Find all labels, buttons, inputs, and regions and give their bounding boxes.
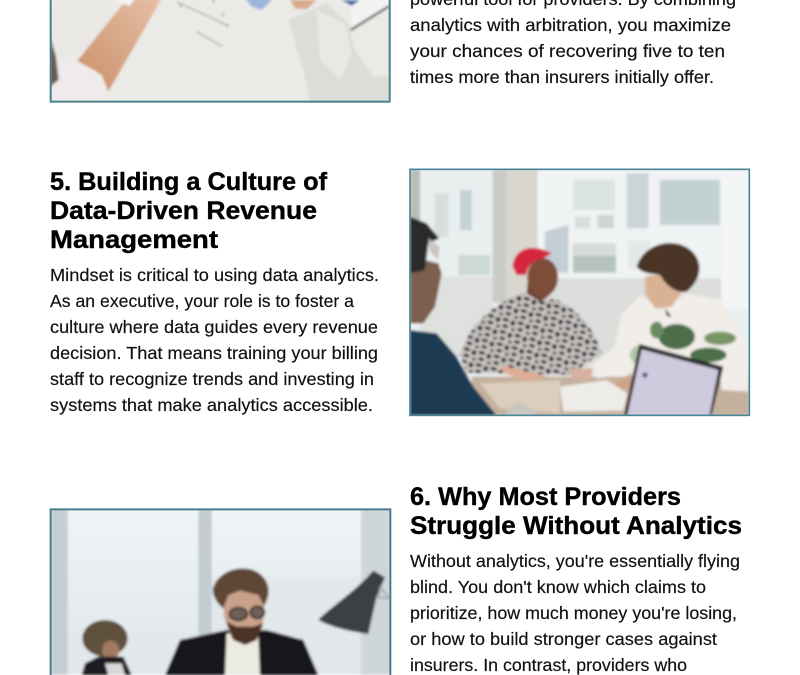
laptop — [624, 344, 723, 415]
heading: section 6: 6. Why Most Providers — [410, 483, 681, 511]
body text: section 5: Mindset is critical to using data analytics. — [50, 265, 379, 285]
photo: man with glasses at office desk — [51, 509, 390, 675]
body text: section 6: insurers. In contrast, providers who — [410, 655, 687, 675]
body text: section 4 ending: times more than insurers initially offer. — [410, 67, 714, 87]
photo: desk with two people reviewing documents — [50, 0, 390, 102]
man — [165, 630, 318, 675]
body text: section 5 — [50, 265, 379, 415]
heading: section 5: Data-Driven Revenue — [50, 197, 317, 225]
body text: section 5: staff to recognize trends and investing in — [50, 369, 374, 389]
body text: section 6: blind. You don't know which claims to — [410, 577, 706, 597]
body text: section 5: systems that make analytics accessible. — [50, 395, 373, 415]
body text: section 6 — [410, 551, 740, 675]
body text: section 5: culture where data guides every revenue — [50, 317, 378, 337]
body text: section 5: As an executive, your role is to foster a — [50, 291, 354, 311]
blurred child — [82, 620, 128, 657]
body text: section 4 ending: analytics with arbitration, you maximize — [410, 15, 731, 35]
body text: section 6: or how to build stronger cases against — [410, 629, 717, 649]
right man — [590, 293, 748, 392]
body text: section 4 ending — [410, 0, 736, 87]
lamp — [318, 571, 385, 634]
woman — [460, 293, 602, 375]
left man — [410, 330, 497, 415]
plant — [630, 322, 736, 365]
body text: section 4 ending: your chances of recovering five to ten — [410, 41, 725, 61]
body text: section 5: decision. That means training your billing — [50, 343, 378, 363]
heading: section 5 — [50, 168, 328, 254]
photo: three colleagues meeting at a table — [410, 169, 749, 415]
body text: section 6: Without analytics, you're essentially flying — [410, 551, 740, 571]
body text: section 6: prioritize, how much money you're losing, — [410, 603, 737, 623]
heading: section 5: 5. Building a Culture of — [50, 168, 328, 196]
heading: section 5: Management — [50, 226, 219, 254]
heading: section 6 — [410, 483, 742, 540]
heading: section 6: Struggle Without Analytics — [410, 512, 742, 540]
